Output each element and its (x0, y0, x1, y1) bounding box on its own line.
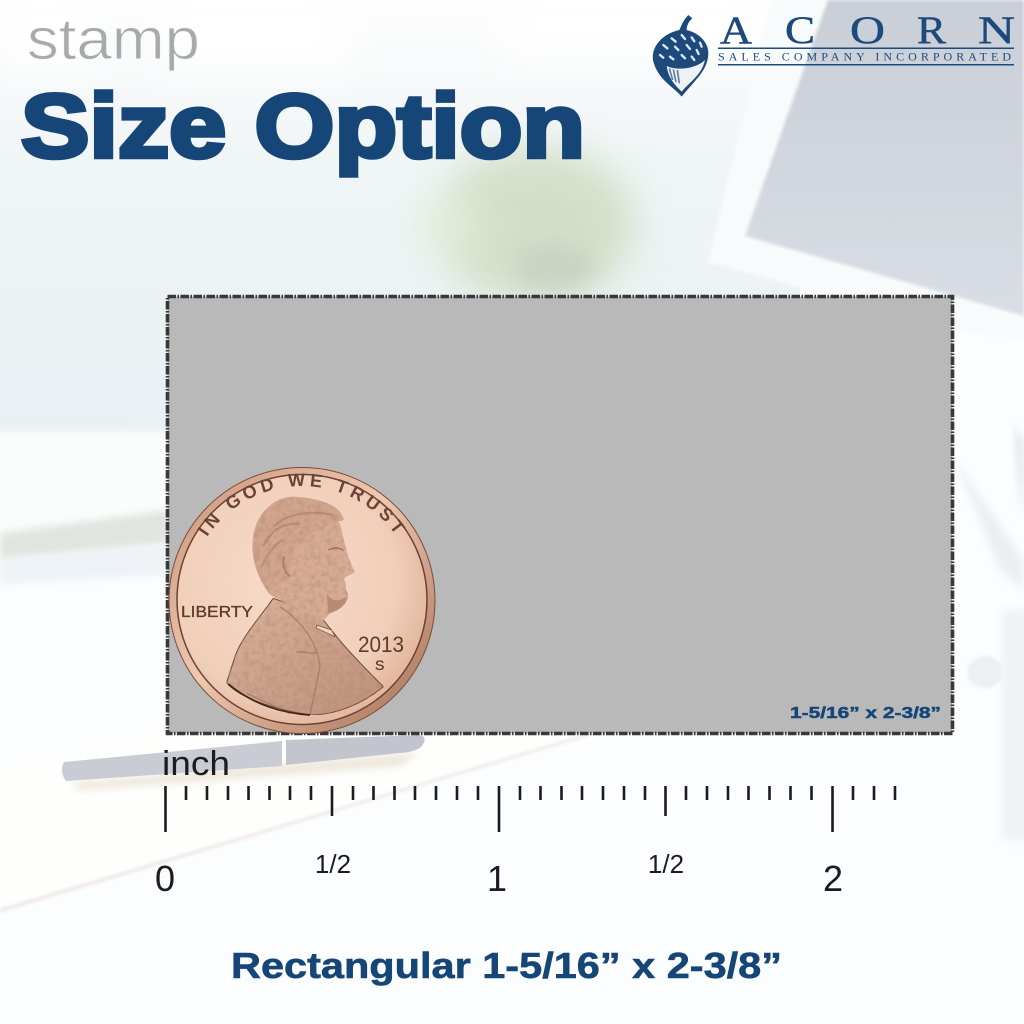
icon: penny coin: S (375, 657, 384, 673)
plant (416, 147, 635, 303)
ruler numbers: 1/2 (315, 849, 351, 879)
ruler numbers: 1 (487, 858, 507, 899)
ruler numbers (155, 849, 843, 899)
icon: penny coin: 2013 (358, 632, 404, 657)
logo wordmark: R (917, 9, 946, 52)
icon: penny coin (168, 467, 436, 734)
ruler unit label: inch (162, 745, 230, 783)
size label inside stamp area: 1-5/16” x 2-3/8” (790, 705, 941, 722)
logo wordmark (720, 9, 1015, 52)
pen (70, 752, 420, 790)
paper sheet (0, 733, 590, 908)
ruler (155, 745, 895, 899)
title: Size Option: Size Option (21, 77, 585, 177)
icon: acorn (653, 15, 708, 97)
icon: penny coin: LIBERTY (181, 604, 253, 621)
logo: Acorn Sales Company Incorporated: SALES COMPANY INCORPORATED (718, 50, 1011, 64)
ruler numbers: 1/2 (648, 849, 684, 879)
caption: size description: Rectangular 1-5/16” x 2-3/8” (231, 945, 782, 986)
logo wordmark: C (785, 9, 815, 52)
logo wordmark: A (720, 9, 752, 52)
logo wordmark: O (850, 9, 885, 52)
logo wordmark: N (978, 9, 1015, 52)
coin inscription: IN GOD WE TRUST (198, 473, 406, 536)
small heading: stamp: stamp (27, 7, 200, 72)
ruler ticks (166, 786, 895, 832)
ruler numbers: 2 (823, 858, 843, 899)
coin portrait (227, 497, 383, 715)
ruler numbers: 0 (155, 858, 175, 899)
logo: Acorn Sales Company Incorporated (653, 9, 1015, 97)
